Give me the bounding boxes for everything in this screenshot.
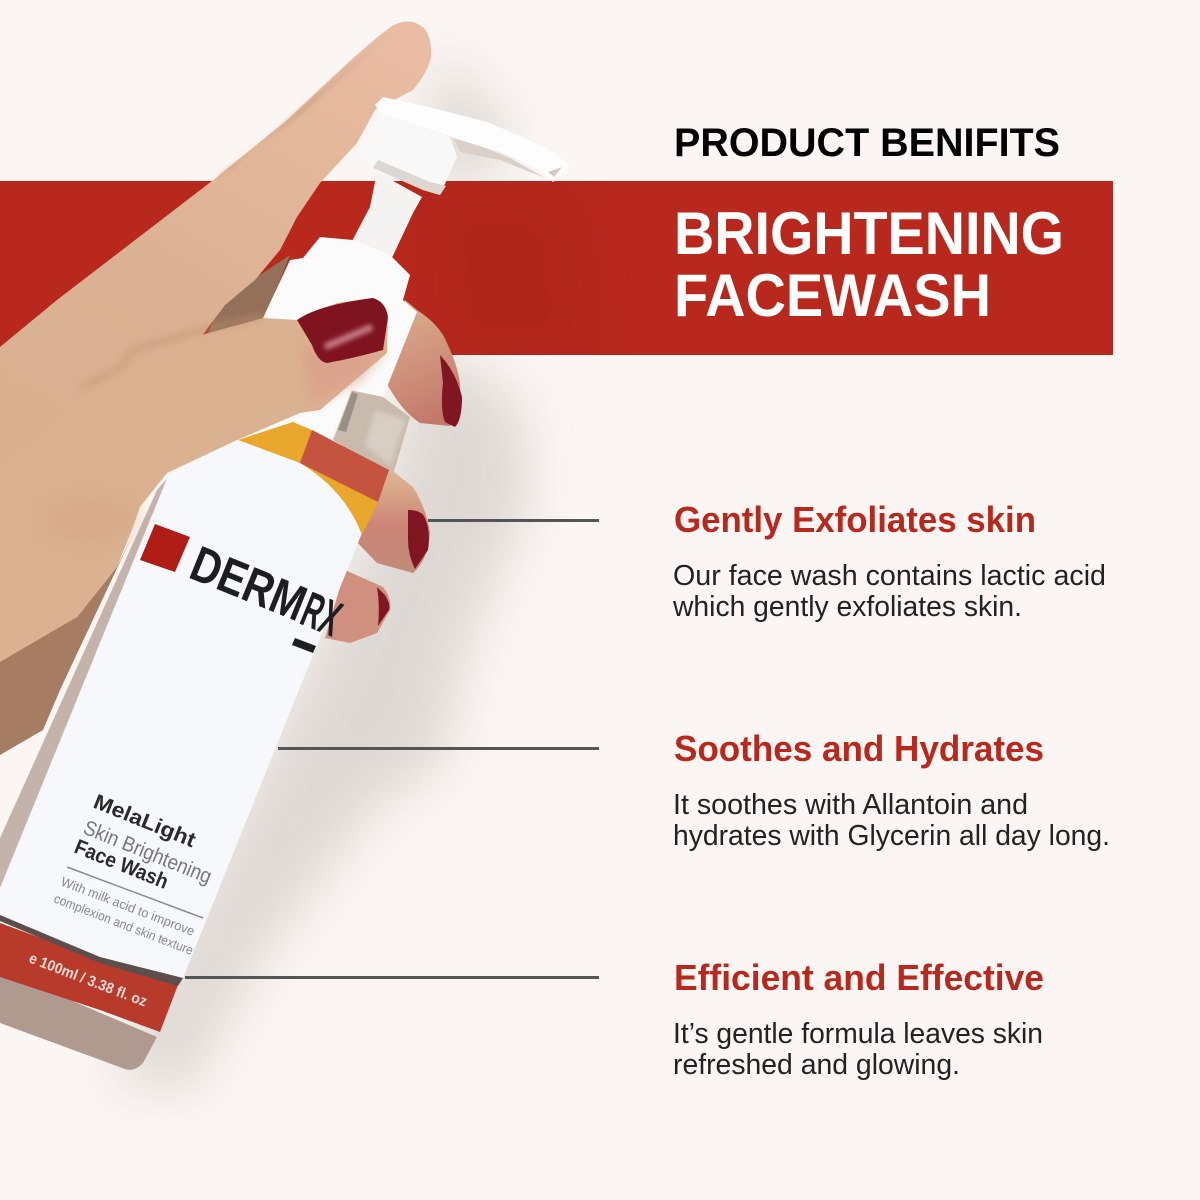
bottle body — [0, 422, 389, 1070]
hand: lower palm shade — [0, 530, 135, 755]
connector line 1 — [428, 519, 599, 522]
pump cap — [358, 113, 457, 195]
benefit 1: Gently Exfoliates skin — [674, 499, 1036, 540]
banner title — [674, 200, 1064, 329]
banner title: FACEWASH — [674, 262, 991, 329]
benefit 3: Efficient and Effective — [674, 957, 1044, 998]
banner shadow — [420, 170, 600, 370]
pump head underside — [452, 135, 545, 178]
hand: back fingers — [325, 300, 462, 643]
benefit 3 — [673, 957, 1044, 1081]
red banner — [0, 181, 1113, 355]
bottle pump — [240, 97, 571, 440]
product: hand holding bottle — [0, 21, 571, 1070]
heading: PRODUCT BENIFITS — [674, 121, 1060, 165]
clear bottle section — [333, 387, 410, 475]
connector line 2 — [278, 747, 599, 750]
product name: Face Wash — [71, 835, 172, 894]
benefit 3: It’s gentle formula leaves skin — [673, 1018, 1043, 1050]
logo text: DERM — [183, 535, 314, 632]
hand: palm and thumb — [0, 298, 388, 662]
finger shading — [215, 30, 392, 178]
white label — [0, 440, 362, 978]
hand: knuckle tone — [40, 498, 140, 542]
thumb tip tint — [300, 345, 385, 405]
benefit 3: refreshed and glowing. — [673, 1049, 960, 1081]
clear bottle base — [0, 970, 157, 1070]
hand: index finger and palm — [0, 21, 431, 500]
banner title: BRIGHTENING — [674, 200, 1064, 267]
red base band — [0, 923, 178, 1032]
product description: With milk acid to improve — [59, 874, 197, 939]
volume text: e 100ml / 3.38 fl. oz — [27, 950, 149, 1011]
benefit 2: Soothes and Hydrates — [674, 728, 1044, 769]
logo text: RX — [294, 581, 349, 647]
red label band — [300, 430, 389, 502]
bottle left edge — [0, 475, 170, 890]
pump stem — [350, 172, 422, 262]
connector line 3 — [185, 976, 599, 979]
fingernail 2 — [408, 510, 429, 569]
fingernail 3 — [377, 587, 390, 626]
benefit 2: hydrates with Glycerin all day long. — [673, 820, 1110, 852]
label divider — [67, 867, 203, 918]
benefit 1 — [672, 499, 1106, 623]
benefit 2 — [673, 728, 1110, 852]
product name: MelaLight — [90, 790, 199, 852]
benefit 1: Our face wash contains lactic acid — [673, 560, 1106, 592]
red square on logo — [140, 524, 190, 572]
soft product shadow — [110, 50, 530, 1090]
fingernail 1 — [440, 355, 462, 427]
product name — [71, 790, 215, 894]
product name: Skin Brightening — [80, 816, 215, 889]
thumb nail — [297, 298, 388, 363]
product description: complexion and skin texture — [52, 891, 195, 958]
metallic trim — [0, 915, 183, 986]
yellow band — [238, 422, 389, 535]
benefit 2: It soothes with Allantoin and — [673, 789, 1028, 821]
pump collar — [240, 237, 417, 440]
hand: web between finger and thumb — [205, 255, 290, 340]
benefit 1: which gently exfoliates skin. — [672, 591, 1022, 623]
hand: creases — [80, 317, 263, 388]
pump nozzle — [375, 97, 571, 182]
